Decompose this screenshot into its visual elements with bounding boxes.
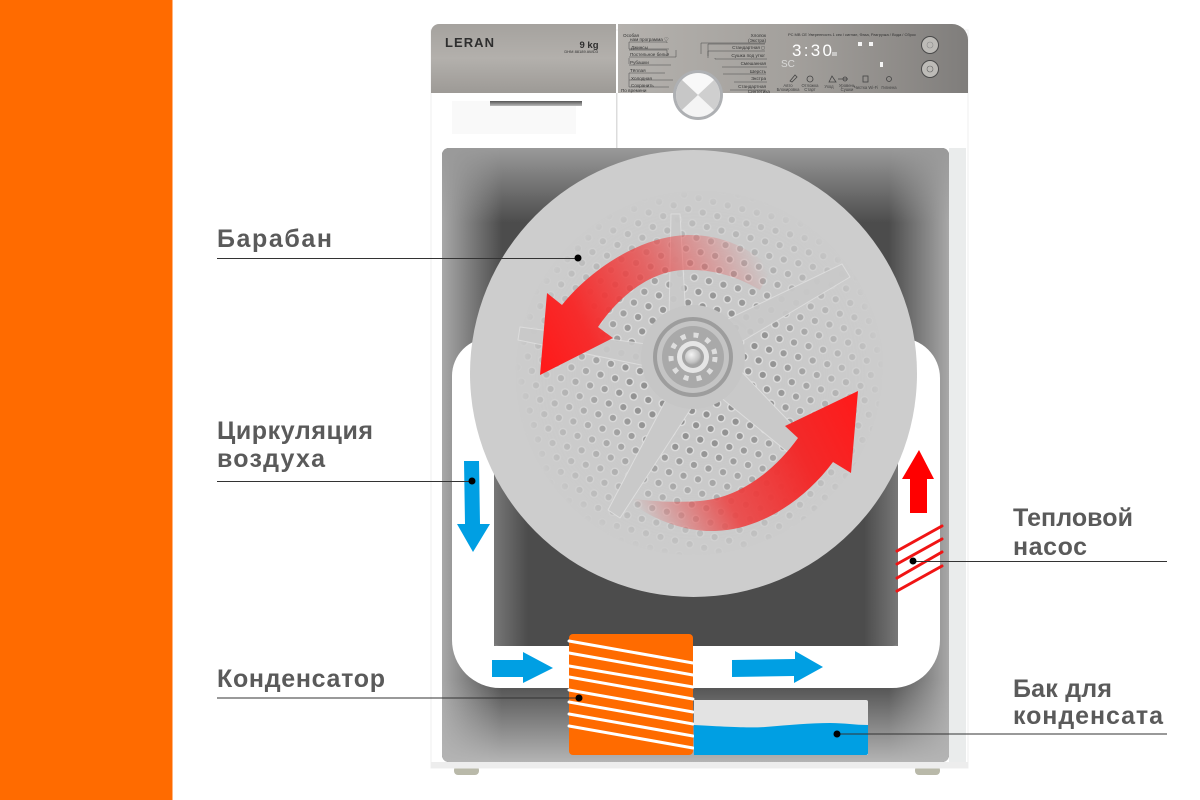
label: condensate tank — [834, 675, 1167, 738]
dryer machine — [431, 24, 968, 775]
right side edge — [949, 148, 966, 768]
capacity: 9 kg — [579, 40, 599, 51]
function labels: Сушки — [841, 87, 854, 92]
program labels right: Экстра — [751, 76, 766, 81]
cutaway cavity — [442, 148, 949, 762]
condenser — [569, 634, 693, 755]
program labels left: Джинсы — [631, 45, 648, 50]
machine feet — [454, 766, 940, 775]
right control panel — [618, 24, 968, 94]
program labels left: По времени — [621, 88, 647, 93]
label: condensate tank: конденсата — [1013, 702, 1164, 730]
function labels: Уровень — [839, 83, 856, 88]
buttons — [922, 36, 938, 78]
display notice: РС МВ СЕ Уверенность 1 сек / сигнал, Фаза, Разгрузка / Вода / Сброс — [788, 32, 916, 37]
function labels — [777, 83, 897, 92]
display temperature: SC — [781, 59, 795, 70]
function labels: Старт — [804, 87, 816, 92]
label: air circulation: воздуха — [217, 445, 326, 473]
label: air circulation: Циркуляция — [217, 417, 373, 445]
blue arrow: right after condenser — [732, 651, 823, 683]
program labels right: Хлопок — [751, 33, 767, 38]
label: heat pump: насос — [1013, 533, 1087, 561]
drum star centre — [641, 305, 745, 409]
red arrow: lower drum rotation — [622, 391, 858, 531]
program labels right: Синтетика — [748, 89, 770, 94]
brand logo: LERAN — [445, 35, 494, 50]
red arrow: upper drum rotation — [540, 235, 772, 375]
label: air circulation — [217, 417, 476, 484]
drum spokes — [518, 214, 850, 518]
program labels left: нам программа ♡ — [630, 37, 669, 43]
program labels left: Холодная — [631, 76, 652, 81]
program labels right: Стандартная — [738, 84, 767, 89]
label: condensate tank: Бак для — [1013, 675, 1112, 703]
drum perforation — [526, 200, 874, 550]
display time: 3:30 — [792, 41, 832, 60]
heat pump coil — [897, 526, 942, 591]
program labels left: Тёплая — [630, 68, 646, 73]
function labels: Авто — [783, 83, 793, 88]
water — [694, 723, 868, 755]
drum — [470, 150, 917, 597]
blue arrow: right before condenser — [492, 652, 553, 683]
program labels right: (Экстра) — [748, 38, 766, 43]
label: drum — [217, 225, 582, 262]
program labels right: Шерсть — [750, 69, 767, 74]
function icons — [790, 75, 892, 82]
panel divider — [616, 93, 618, 148]
machine body — [431, 30, 968, 768]
program labels left: Рубашки — [630, 60, 649, 65]
condensate tank — [694, 700, 868, 755]
indicator lights — [832, 42, 883, 67]
label: condenser: Конденсатор — [217, 665, 385, 693]
program labels left: Особая — [623, 33, 640, 38]
function labels: Чистка Wi-Fi — [854, 85, 878, 90]
function labels: Блокировка — [777, 87, 800, 92]
control dial — [673, 70, 723, 120]
program labels left: Сохранить — [631, 83, 654, 88]
label: heat pump: Тепловой — [1013, 504, 1133, 532]
red arrow: up — [902, 450, 934, 513]
function labels: Отложка — [802, 83, 819, 88]
program labels left — [621, 33, 676, 93]
program labels right: Смешанная — [741, 61, 767, 66]
program labels right — [701, 33, 770, 94]
left control panel — [431, 24, 616, 93]
function labels: Уход — [824, 84, 834, 89]
function labels: Гигиена — [881, 85, 897, 90]
model name: DHM 88189 AWD3 — [564, 49, 599, 54]
inner chamber — [494, 338, 898, 646]
program labels right: Стандартная ◻ — [732, 45, 765, 50]
blue arrow: down — [457, 461, 490, 552]
orange side band — [0, 0, 172, 800]
drum hub — [653, 317, 733, 397]
label: drum: Барабан — [217, 225, 332, 253]
bottom edge — [431, 762, 968, 768]
air circulation duct — [452, 338, 940, 688]
program labels right: Сушка под утюг — [731, 53, 765, 58]
label: condenser — [217, 665, 582, 702]
label: heat pump — [910, 504, 1167, 564]
program labels left: Постельное бельё — [630, 52, 670, 57]
detergent drawer handle — [452, 101, 582, 134]
